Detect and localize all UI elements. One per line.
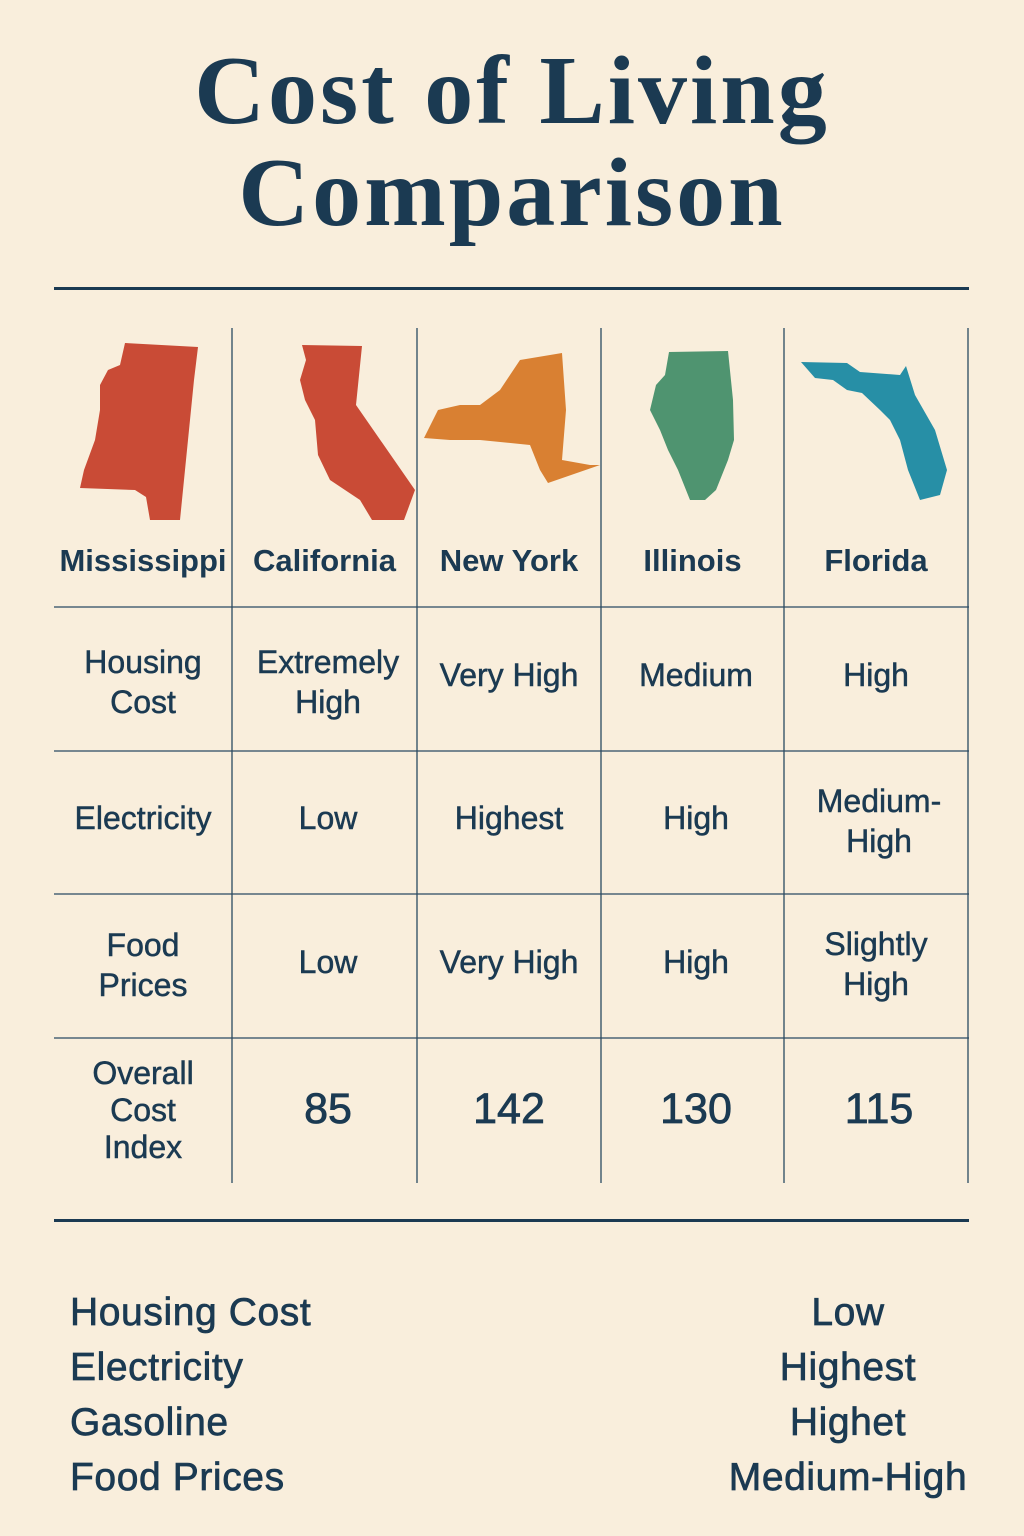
summary values: Highet — [790, 1401, 906, 1444]
row: food: Food — [107, 927, 179, 963]
row: housing — [84, 644, 202, 720]
text: High — [663, 944, 729, 980]
title: Cost of Living — [194, 37, 830, 145]
icon: Mississippi — [80, 343, 198, 520]
title — [194, 37, 830, 247]
text: High — [295, 684, 361, 720]
icon: California — [300, 345, 415, 520]
text: California — [253, 543, 396, 578]
text: Highest — [455, 800, 563, 836]
row: overall index: Overall — [92, 1055, 194, 1091]
state maps — [80, 343, 947, 520]
text: High — [843, 657, 909, 693]
summary labels: Housing Cost — [70, 1291, 311, 1334]
comparison table — [54, 328, 969, 1183]
icon: Illinois — [650, 351, 734, 500]
text: 115 — [845, 1085, 913, 1133]
text: Low — [299, 800, 357, 836]
row: overall index: Cost — [110, 1092, 176, 1128]
text: 142 — [473, 1085, 545, 1133]
text: Low — [299, 944, 357, 980]
title: Comparison — [238, 139, 786, 247]
text: High — [846, 823, 912, 859]
text: Medium — [639, 657, 753, 693]
summary values — [729, 1291, 967, 1499]
row: overall index — [92, 1055, 194, 1165]
text: Medium- — [817, 783, 941, 819]
row: overall index: Index — [104, 1129, 182, 1165]
icon: New York — [424, 353, 600, 483]
text: Very High — [440, 944, 578, 980]
summary labels: Electricity — [70, 1346, 243, 1389]
summary values: Low — [811, 1291, 885, 1334]
row: food — [99, 927, 187, 1003]
text: Florida — [824, 543, 928, 578]
text: High — [663, 800, 729, 836]
text: Extremely — [257, 644, 399, 680]
icon: Florida — [801, 362, 947, 500]
row: housing: Housing — [84, 644, 202, 680]
text: High — [843, 966, 909, 1002]
row: housing: Cost — [110, 684, 176, 720]
summary labels — [70, 1291, 311, 1499]
state names: Mississippi — [59, 543, 227, 578]
text: 130 — [660, 1085, 732, 1133]
summary values: Medium-High — [729, 1456, 967, 1499]
row: electricity: Electricity — [75, 800, 211, 836]
summary labels: Food Prices — [70, 1456, 285, 1499]
text: Illinois — [643, 543, 742, 578]
text: New York — [440, 543, 578, 578]
row: food: Prices — [99, 967, 187, 1003]
text: Slightly — [824, 926, 928, 962]
summary values: Highest — [780, 1346, 916, 1389]
grid lines — [54, 328, 969, 1183]
text: 85 — [304, 1085, 352, 1133]
text: Very High — [440, 657, 578, 693]
summary labels: Gasoline — [70, 1401, 229, 1444]
